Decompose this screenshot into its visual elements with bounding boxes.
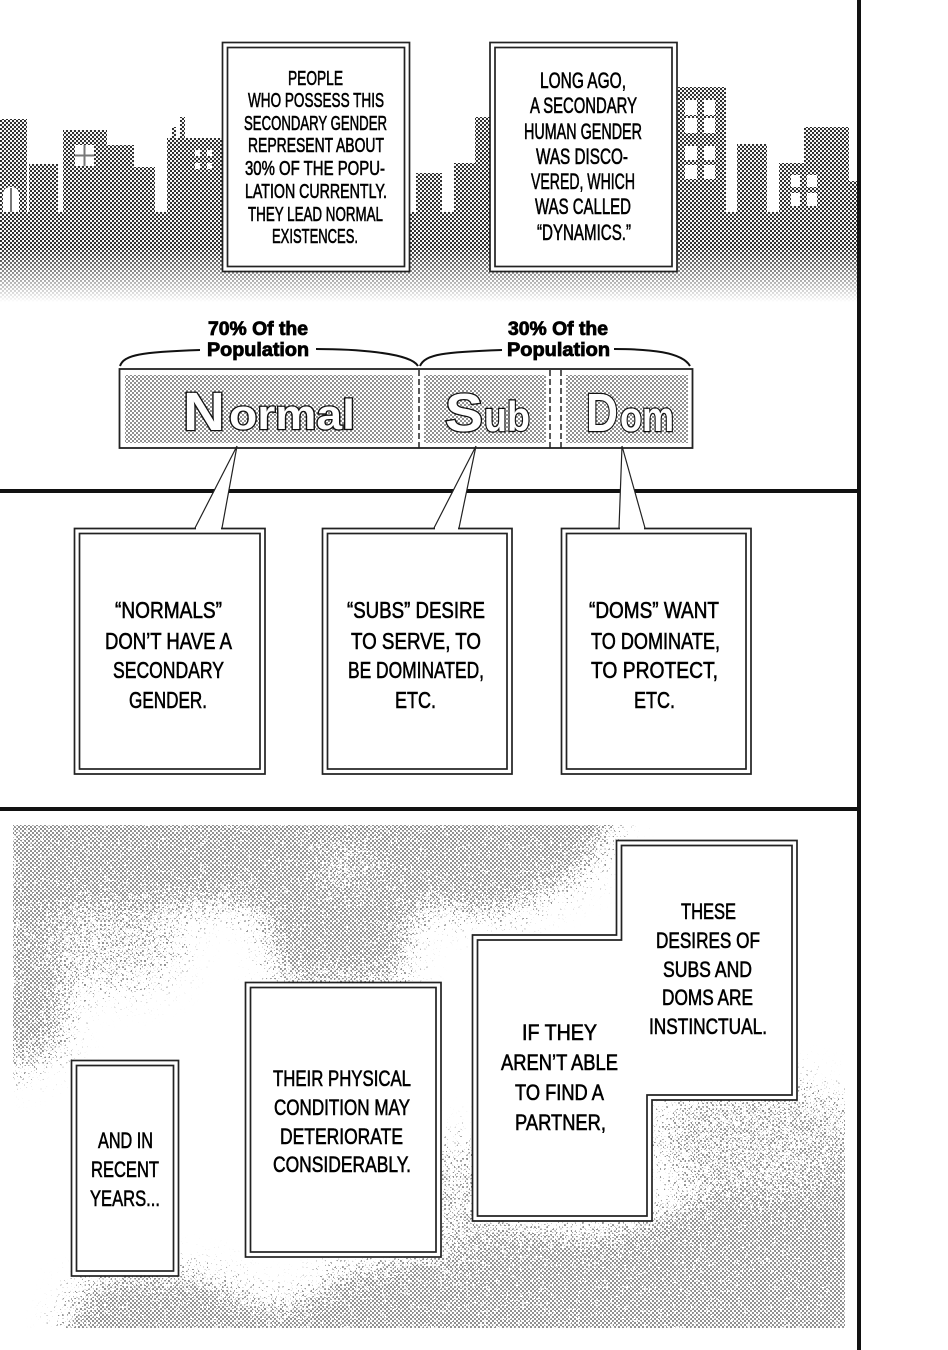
caption: instinctual desires, stepped box: DESIRES OF — [656, 928, 760, 953]
segment: dom — [586, 383, 674, 443]
caption: population share: REPRESENT ABOUT — [248, 135, 384, 157]
caption: dynamics discovered: LONG AGO, — [540, 68, 626, 93]
segment: sub: S — [445, 383, 483, 443]
caption: physical condition: CONDITION MAY — [274, 1095, 410, 1120]
caption: instinctual desires, stepped box: TO FIND A — [515, 1080, 604, 1105]
caption: instinctual desires, stepped box: DOMS ARE — [662, 985, 753, 1010]
caption: instinctual desires, stepped box: SUBS AND — [663, 957, 752, 982]
caption: and in recent years: YEARS... — [90, 1186, 160, 1211]
definition: doms: ETC. — [634, 687, 675, 713]
definition: subs: BE DOMINATED, — [348, 657, 484, 683]
caption: dynamics discovered — [490, 42, 677, 272]
caption: and in recent years: AND IN — [98, 1128, 153, 1153]
caption: dynamics discovered: HUMAN GENDER — [524, 119, 642, 144]
caption: population share: EXISTENCES. — [272, 226, 358, 248]
caption: population share — [222, 42, 410, 272]
definition: doms — [562, 446, 751, 774]
population bar — [120, 369, 692, 448]
caption: instinctual desires, stepped box: AREN’T ABLE — [501, 1050, 618, 1075]
label: 30 percent — [420, 319, 690, 366]
caption: instinctual desires, stepped box: THESE — [681, 899, 736, 924]
caption: population share: PEOPLE — [288, 68, 343, 90]
caption: and in recent years: RECENT — [91, 1157, 159, 1182]
definition: subs — [322, 446, 512, 774]
segment: sub: ub — [484, 393, 530, 440]
definition: normals: GENDER. — [129, 687, 207, 713]
caption: dynamics discovered: WAS CALLED — [535, 194, 631, 219]
caption: population share: WHO POSSESS THIS — [248, 90, 384, 112]
segment: sub — [445, 383, 530, 443]
caption: dynamics discovered: WAS DISCO- — [536, 144, 628, 169]
population chart — [120, 319, 692, 448]
panel: cloudy background tone — [13, 825, 845, 1328]
caption: population share: LATION CURRENTLY. — [245, 181, 387, 203]
segment: dom: D — [586, 383, 618, 443]
definition: doms: TO PROTECT, — [591, 657, 718, 683]
skyline silhouette — [0, 87, 857, 305]
label: 70 percent: Population — [207, 340, 309, 361]
segment: dom: om — [620, 393, 674, 440]
caption: physical condition: THEIR PHYSICAL — [273, 1066, 411, 1091]
segment: normal — [183, 382, 355, 442]
label: 30 percent: Population — [507, 340, 610, 361]
caption: physical condition: CONSIDERABLY. — [273, 1152, 411, 1177]
caption: dynamics discovered: A SECONDARY — [530, 93, 637, 118]
definition: subs: ETC. — [395, 687, 436, 713]
label: 70 percent: 70% Of the — [208, 319, 308, 340]
segment: normal: ormal — [229, 391, 355, 438]
definition: normals: DON’T HAVE A — [105, 628, 233, 654]
definition: normals: “NORMALS” — [115, 597, 222, 623]
caption: physical condition — [246, 982, 441, 1257]
definition: doms: “DOMS” WANT — [589, 597, 719, 623]
definition: subs: TO SERVE, TO — [351, 628, 481, 654]
label: 30 percent: 30% Of the — [508, 319, 608, 340]
caption: dynamics discovered: VERED, WHICH — [531, 169, 635, 194]
caption: instinctual desires, stepped box: PARTNER, — [515, 1110, 606, 1135]
label: 70 percent — [120, 319, 418, 366]
caption: and in recent years — [72, 1060, 178, 1276]
definition: normals: SECONDARY — [113, 657, 224, 683]
segment: normal: N — [183, 382, 225, 442]
caption: instinctual desires, stepped box — [472, 840, 797, 1221]
caption: physical condition: DETERIORATE — [280, 1124, 403, 1149]
panel: city skyline intro — [0, 42, 857, 305]
caption: population share: SECONDARY GENDER — [244, 113, 387, 135]
caption: instinctual desires, stepped box: IF THEY — [522, 1020, 597, 1045]
definition: doms: TO DOMINATE, — [591, 628, 720, 654]
caption: population share: 30% OF THE POPU- — [245, 158, 385, 180]
definition: normals — [74, 446, 265, 774]
caption: dynamics discovered: “DYNAMICS.” — [537, 220, 631, 245]
caption: instinctual desires, stepped box: INSTINCTUAL. — [649, 1014, 767, 1039]
caption: population share: THEY LEAD NORMAL — [248, 204, 383, 226]
definition: subs: “SUBS” DESIRE — [347, 597, 485, 623]
